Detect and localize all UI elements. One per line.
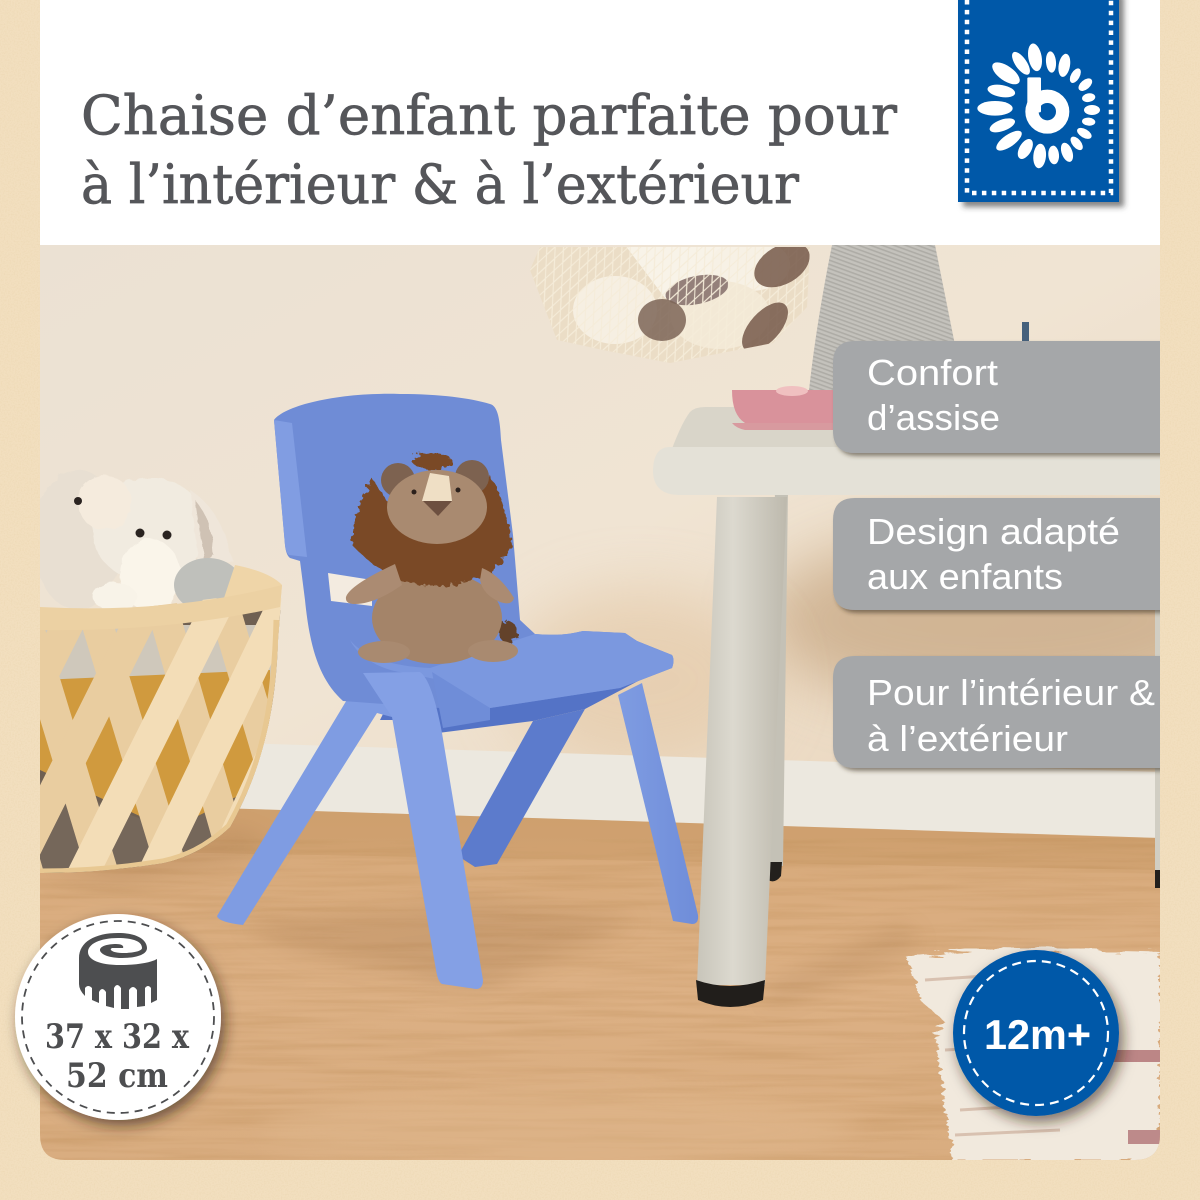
- badge: age 12 months plus: 12m+: [984, 1011, 1091, 1058]
- blue chair: [217, 394, 698, 989]
- rear right leg: [618, 683, 698, 924]
- wooden floor: [40, 803, 1160, 1170]
- table: [653, 407, 1161, 1007]
- badge: dimensions: [15, 914, 221, 1120]
- baseboard: [240, 743, 1160, 840]
- title: à l’intérieur & à l’extérieur: [81, 153, 799, 216]
- feature pill: indoor and outdoor: Pour l’intérieur &: [867, 672, 1155, 713]
- backrest side lip: [274, 420, 307, 557]
- sheep and rabbit eyes: [74, 497, 172, 540]
- table right rear leg: [1155, 610, 1160, 888]
- feature pill: confort: d’assise: [867, 397, 1000, 438]
- feature pill: design: Design adapté: [867, 511, 1120, 552]
- title: [81, 84, 897, 216]
- feature pill: confort: [833, 341, 1170, 453]
- flower logo: [977, 42, 1100, 169]
- pink plate: [732, 386, 835, 430]
- lion tail: [499, 621, 517, 643]
- title: Chaise d’enfant parfaite pour: [81, 84, 897, 147]
- rear diagonal leg: [458, 709, 585, 867]
- feature pill: indoor and outdoor: à l’extérieur: [867, 718, 1068, 759]
- wall: [40, 245, 1160, 762]
- lion head: [387, 470, 487, 544]
- dimensions text: [45, 1017, 190, 1096]
- basket contents and weave: [40, 598, 282, 873]
- plush sheep and rabbit: [78, 474, 214, 608]
- lion eyes: [412, 488, 460, 494]
- basket front rim: [40, 585, 282, 630]
- stitched border: [967, 0, 1111, 193]
- blue straw: [1022, 322, 1029, 341]
- panel: product photo: [0, 234, 1200, 1170]
- table rear leg: [768, 490, 788, 881]
- feature pill: indoor and outdoor: [833, 656, 1170, 768]
- lion arms: [346, 564, 514, 604]
- seat top: [350, 631, 674, 708]
- backrest opening: [328, 573, 372, 606]
- seat underside: [380, 680, 640, 733]
- lion nose: [423, 501, 452, 516]
- floor shadows: [88, 837, 904, 992]
- grey bird toy: [174, 558, 234, 603]
- lion mane: [352, 453, 512, 586]
- dimensions text: 37 x 32 x: [45, 1017, 190, 1057]
- lion body: [372, 572, 502, 664]
- seat front corner: [432, 672, 490, 728]
- front left diagonal leg: [217, 701, 392, 925]
- table top surface: [672, 407, 838, 447]
- chair shell: [274, 394, 674, 708]
- grey towel: [808, 245, 955, 400]
- table front leg: [697, 497, 787, 985]
- lion muzzle stripe: [422, 473, 452, 501]
- lion feet: [358, 640, 518, 663]
- brand logo tag: [958, 0, 1119, 202]
- basket with plush toys: [40, 474, 282, 873]
- badge: age 12 months plus: [953, 950, 1119, 1116]
- table front rim: [653, 447, 1160, 495]
- front leg: [363, 672, 483, 989]
- header panel: [40, 0, 1160, 246]
- feature pill: design: [833, 498, 1170, 610]
- hanging net with plush toys: [530, 247, 810, 363]
- dimensions text: 52 cm: [66, 1056, 168, 1096]
- rug: [908, 948, 1162, 1160]
- table foot: [696, 980, 765, 1007]
- lion plush: [346, 453, 518, 664]
- lion ears: [381, 460, 489, 497]
- feature pill: design: aux enfants: [867, 556, 1063, 597]
- icon: measuring tape roll: [79, 933, 157, 1009]
- feature pill: confort: Confort: [867, 352, 998, 393]
- basket back rim: [224, 565, 282, 598]
